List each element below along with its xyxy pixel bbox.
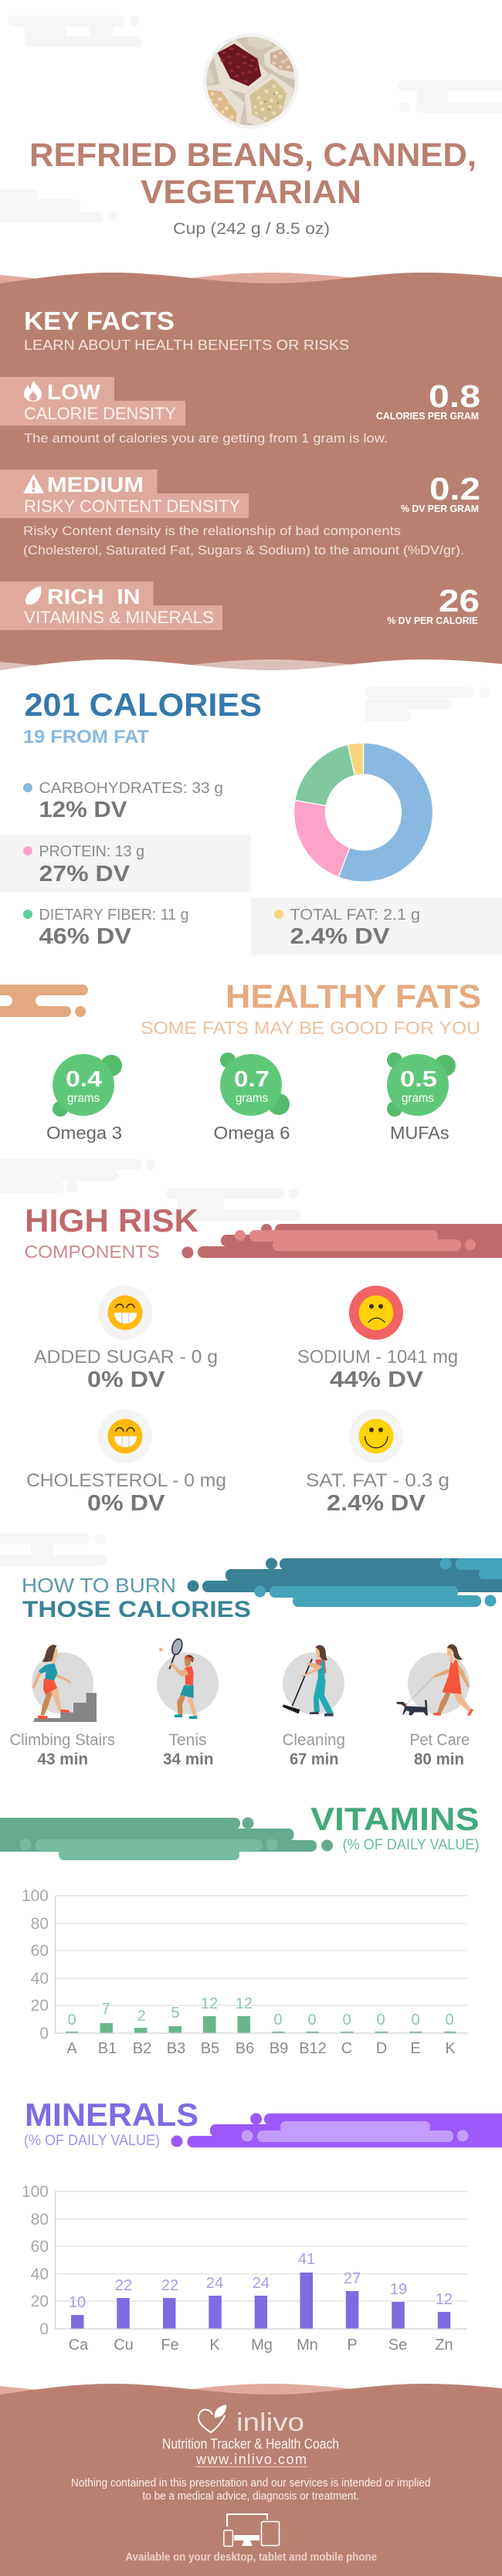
bar chart: vitamins: B5 [201, 2040, 219, 2057]
fat: omega 6: 0.7 [234, 1067, 270, 1092]
healthy fats heading: HEALTHY FATS [226, 978, 481, 1015]
stat: 26 percent dv per calorie [388, 583, 480, 626]
bar chart: vitamins: E [410, 2040, 421, 2057]
icon: grinning face [108, 1296, 142, 1330]
macro: protein: 27% DV [39, 862, 131, 886]
bar chart: vitamins: 0 [307, 2012, 317, 2029]
logo: inlivo: inlivo [236, 2408, 304, 2436]
stat: 26 percent dv per calorie: 26 [439, 583, 480, 619]
minerals heading: MINERALS [25, 2096, 198, 2133]
macro: total fat: 2.4% DV [290, 924, 390, 949]
fat: omega 3: Omega 3 [46, 1123, 122, 1143]
risk: sodium: 44% DV [330, 1368, 424, 1392]
vitamins heading: VITAMINS [310, 1801, 479, 1837]
bar chart: minerals: 20 [31, 2293, 49, 2310]
bar chart: vitamins: A [66, 2040, 77, 2057]
disclaimer: to be a medical advice, diagnosis or treatment. [142, 2490, 359, 2503]
bar chart: vitamins: 0 [411, 2012, 420, 2029]
activity: cleaning: 67 min [290, 1751, 338, 1768]
tagline: Nutrition Tracker & Health Coach [162, 2436, 339, 2452]
fat: omega 6 [213, 1052, 290, 1143]
bar chart: minerals: Cu [114, 2337, 134, 2354]
activity: pet care [396, 1644, 473, 1768]
website: www.inlivo.com [195, 2452, 307, 2467]
stat: 0.8 calories per gram: CALORIES PER GRAM [376, 410, 479, 422]
fat: omega 3: grams [67, 1092, 100, 1105]
label: vitamins and minerals: VITAMINS & MINERALS [24, 608, 214, 627]
bar chart: minerals: 41 [298, 2251, 315, 2268]
icon: woman sweeping [283, 1645, 334, 1717]
risky content description: (Cholesterol, Saturated Fat, Sugars & Sodium) to the amount (%DV/gr). [23, 543, 464, 558]
fat: mufas: 0.5 [400, 1067, 437, 1092]
macro: carbohydrates: 12% DV [39, 798, 127, 822]
bar chart: minerals: 12 [436, 2291, 453, 2308]
bar chart: vitamins: C [341, 2040, 352, 2057]
activity: climbing stairs: 43 min [37, 1751, 88, 1768]
macro: carbohydrates: CARBOHYDRATES: 33 g [39, 780, 223, 797]
bar chart: minerals: 100 [22, 2183, 49, 2201]
risk: sodium: SODIUM - 1041 mg [297, 1347, 458, 1368]
risky content description [23, 524, 464, 558]
bar chart: vitamins: 12 [201, 1995, 218, 2012]
activity: climbing stairs [9, 1645, 115, 1768]
bar chart: vitamins: B9 [270, 2040, 288, 2057]
bar chart: vitamins: 7 [101, 2001, 110, 2018]
activity: pet care: 80 min [414, 1751, 464, 1768]
fat: omega 6: grams [236, 1092, 268, 1105]
bar chart: vitamins: 0 [376, 2012, 385, 2029]
burn heading: THOSE CALORIES [22, 1597, 251, 1622]
decoration: purple bars [171, 2113, 502, 2147]
bar chart: minerals: 60 [31, 2238, 49, 2256]
bar chart: vitamins: B6 [236, 2040, 254, 2057]
burn heading: HOW TO BURN [22, 1574, 176, 1597]
calories heading: 201 CALORIES [25, 686, 262, 723]
disclaimer: Nothing contained in this presentation and our services is intended or implied [71, 2476, 431, 2490]
decoration: green bars [0, 1818, 333, 1860]
macro: carbohydrates [23, 780, 223, 822]
bar chart: minerals: 19 [390, 2281, 407, 2298]
bar chart: vitamins [22, 1887, 467, 2057]
icon: devices [224, 2514, 280, 2546]
bar chart: minerals: 10 [69, 2294, 86, 2311]
macro: total fat [251, 898, 502, 955]
activity: cleaning: Cleaning [283, 1731, 345, 1749]
bar chart: minerals: Mn [297, 2337, 318, 2354]
bar chart: vitamins: 60 [31, 1942, 49, 1960]
stat: 0.2 percent dv per gram: 0.2 [429, 471, 480, 507]
risk: cholesterol: CHOLESTEROL - 0 mg [26, 1470, 226, 1491]
macro: protein [0, 835, 252, 892]
macro: dietary fiber: DIETARY FIBER: 11 g [39, 907, 188, 924]
risk: saturated fat: 2.4% DV [327, 1491, 426, 1516]
stat: 0.2 percent dv per gram: % DV PER GRAM [401, 503, 479, 514]
risky content description: Risky Content density is the relationship of bad components [23, 524, 401, 538]
bar chart: minerals: 40 [31, 2266, 49, 2283]
bar chart: vitamins: 0 [342, 2012, 351, 2029]
bar chart: minerals: 80 [31, 2211, 49, 2229]
icon: warning triangle [23, 474, 44, 493]
icon: woman walking dog [396, 1644, 473, 1716]
bar chart: vitamins: 40 [31, 1970, 49, 1988]
rating: low: LOW [47, 380, 101, 404]
icon: tennis player [159, 1638, 197, 1719]
bar chart: vitamins: B3 [167, 2040, 185, 2057]
donut chart [294, 743, 433, 882]
fat: omega 3: 0.4 [66, 1067, 102, 1092]
risk: sodium [297, 1286, 458, 1392]
fat: mufas: MUFAs [390, 1123, 449, 1143]
fat: omega 3 [46, 1054, 122, 1143]
bar chart: vitamins: 2 [137, 2008, 146, 2025]
icon: flame [24, 381, 42, 402]
high risk subheading: COMPONENTS [25, 1242, 159, 1262]
calorie density description: The amount of calories you are getting from 1 gram is low. [24, 431, 388, 446]
bar chart: minerals: K [209, 2337, 220, 2354]
icon: leaf [25, 586, 41, 605]
bar chart: vitamins: 20 [31, 1997, 49, 2015]
bar chart: minerals: Mg [251, 2337, 273, 2354]
risk: added sugar [34, 1286, 218, 1392]
bar chart: minerals: Zn [435, 2337, 453, 2354]
stat: 26 percent dv per calorie: % DV PER CALORIE [388, 615, 478, 626]
stat: 0.8 calories per gram: 0.8 [429, 378, 480, 414]
bar chart: vitamins: D [376, 2040, 387, 2057]
bar chart: vitamins: 80 [31, 1915, 49, 1933]
healthy fats subheading: SOME FATS MAY BE GOOD FOR YOU [141, 1018, 480, 1038]
bar chart: vitamins: 0 [273, 2012, 283, 2029]
bar chart: vitamins: 5 [171, 2005, 180, 2022]
bar chart: minerals: 22 [115, 2277, 132, 2294]
macro: protein: PROTEIN: 13 g [39, 843, 144, 860]
activity: tennis [157, 1638, 219, 1768]
bar chart: vitamins: B12 [299, 2040, 327, 2057]
key facts subheading: LEARN ABOUT HEALTH BENEFITS OR RISKS [24, 337, 349, 353]
bar chart: vitamins: 0 [67, 2012, 76, 2029]
bar chart: vitamins: K [445, 2040, 456, 2057]
fat: mufas: grams [402, 1092, 434, 1105]
label: calorie density: CALORIE DENSITY [24, 404, 176, 423]
bar chart: minerals: Se [388, 2337, 407, 2354]
availability note: Available on your desktop, tablet and mobile phone [125, 2551, 377, 2564]
bar chart: vitamins: 12 [236, 1995, 253, 2012]
panel: key facts [0, 273, 502, 680]
macro: total fat: TOTAL FAT: 2.1 g [290, 907, 420, 924]
stat: 0.2 percent dv per gram [401, 471, 480, 514]
decoration: teal bars [187, 1558, 502, 1607]
title [29, 137, 477, 211]
activity: tennis: Tenis [168, 1731, 207, 1749]
bar chart: minerals: Fe [161, 2337, 179, 2354]
bar chart: minerals: 22 [161, 2277, 178, 2294]
bar chart: minerals: Ca [69, 2337, 89, 2354]
bar chart: vitamins: 100 [22, 1887, 49, 1905]
icon: sad face [358, 1296, 394, 1330]
bar chart: minerals: P [347, 2337, 358, 2354]
risk: added sugar: ADDED SUGAR - 0 g [34, 1347, 218, 1368]
bar chart: vitamins: B2 [133, 2040, 151, 2057]
risk: cholesterol: 0% DV [87, 1491, 165, 1516]
icon: smiling face [358, 1419, 394, 1453]
high risk heading: HIGH RISK [25, 1202, 198, 1239]
serving size: Cup (242 g / 8.5 oz) [173, 220, 330, 238]
panel: footer [0, 2384, 502, 2576]
risk: added sugar: 0% DV [87, 1368, 165, 1392]
risk: saturated fat: SAT. FAT - 0.3 g [306, 1470, 449, 1491]
stat: 0.8 calories per gram [376, 378, 480, 422]
burn heading [22, 1574, 251, 1622]
bar chart: minerals: 27 [344, 2270, 361, 2287]
minerals subheading: (% OF DAILY VALUE) [24, 2133, 160, 2149]
activity: pet care: Pet Care [409, 1731, 470, 1749]
rich in row [0, 581, 222, 630]
macro: dietary fiber: 46% DV [39, 924, 132, 949]
risk: saturated fat [306, 1409, 449, 1516]
icon: woman climbing stairs [32, 1645, 97, 1722]
decoration: red bars [182, 1224, 502, 1259]
bar chart: minerals: 24 [206, 2275, 223, 2292]
bar chart: minerals: 24 [253, 2275, 270, 2292]
bar chart: minerals [22, 2183, 467, 2354]
activity: climbing stairs: Climbing Stairs [9, 1731, 115, 1749]
calories from fat: 19 FROM FAT [23, 727, 149, 747]
disclaimer [71, 2476, 431, 2503]
header photo: beans in sacks [202, 31, 300, 131]
bar chart: vitamins: B1 [98, 2040, 117, 2057]
key facts heading: KEY FACTS [24, 307, 175, 335]
bar chart: minerals: 0 [39, 2320, 49, 2338]
title: REFRIED BEANS, CANNED, [29, 137, 477, 174]
rating: rich in: RICH IN [47, 585, 141, 608]
bar chart: vitamins: 0 [445, 2012, 454, 2029]
fat: omega 6: Omega 6 [213, 1123, 290, 1143]
vitamins subheading: (% OF DAILY VALUE) [343, 1837, 479, 1853]
bar chart: vitamins: 0 [39, 2025, 49, 2042]
rating: medium: MEDIUM [47, 473, 144, 497]
activity: cleaning [283, 1645, 345, 1768]
fat: mufas [387, 1052, 456, 1143]
label: risky content density: RISKY CONTENT DENSITY [24, 497, 240, 516]
logo: inlivo [198, 2405, 304, 2436]
decoration: orange bars [0, 985, 90, 1017]
macro: dietary fiber [23, 907, 188, 949]
risky content row [0, 469, 249, 518]
activity: tennis: 34 min [163, 1751, 213, 1768]
risk: cholesterol [26, 1409, 226, 1516]
calorie density row [0, 377, 185, 425]
icon: grinning face [108, 1419, 142, 1453]
title: VEGETARIAN [141, 174, 361, 211]
